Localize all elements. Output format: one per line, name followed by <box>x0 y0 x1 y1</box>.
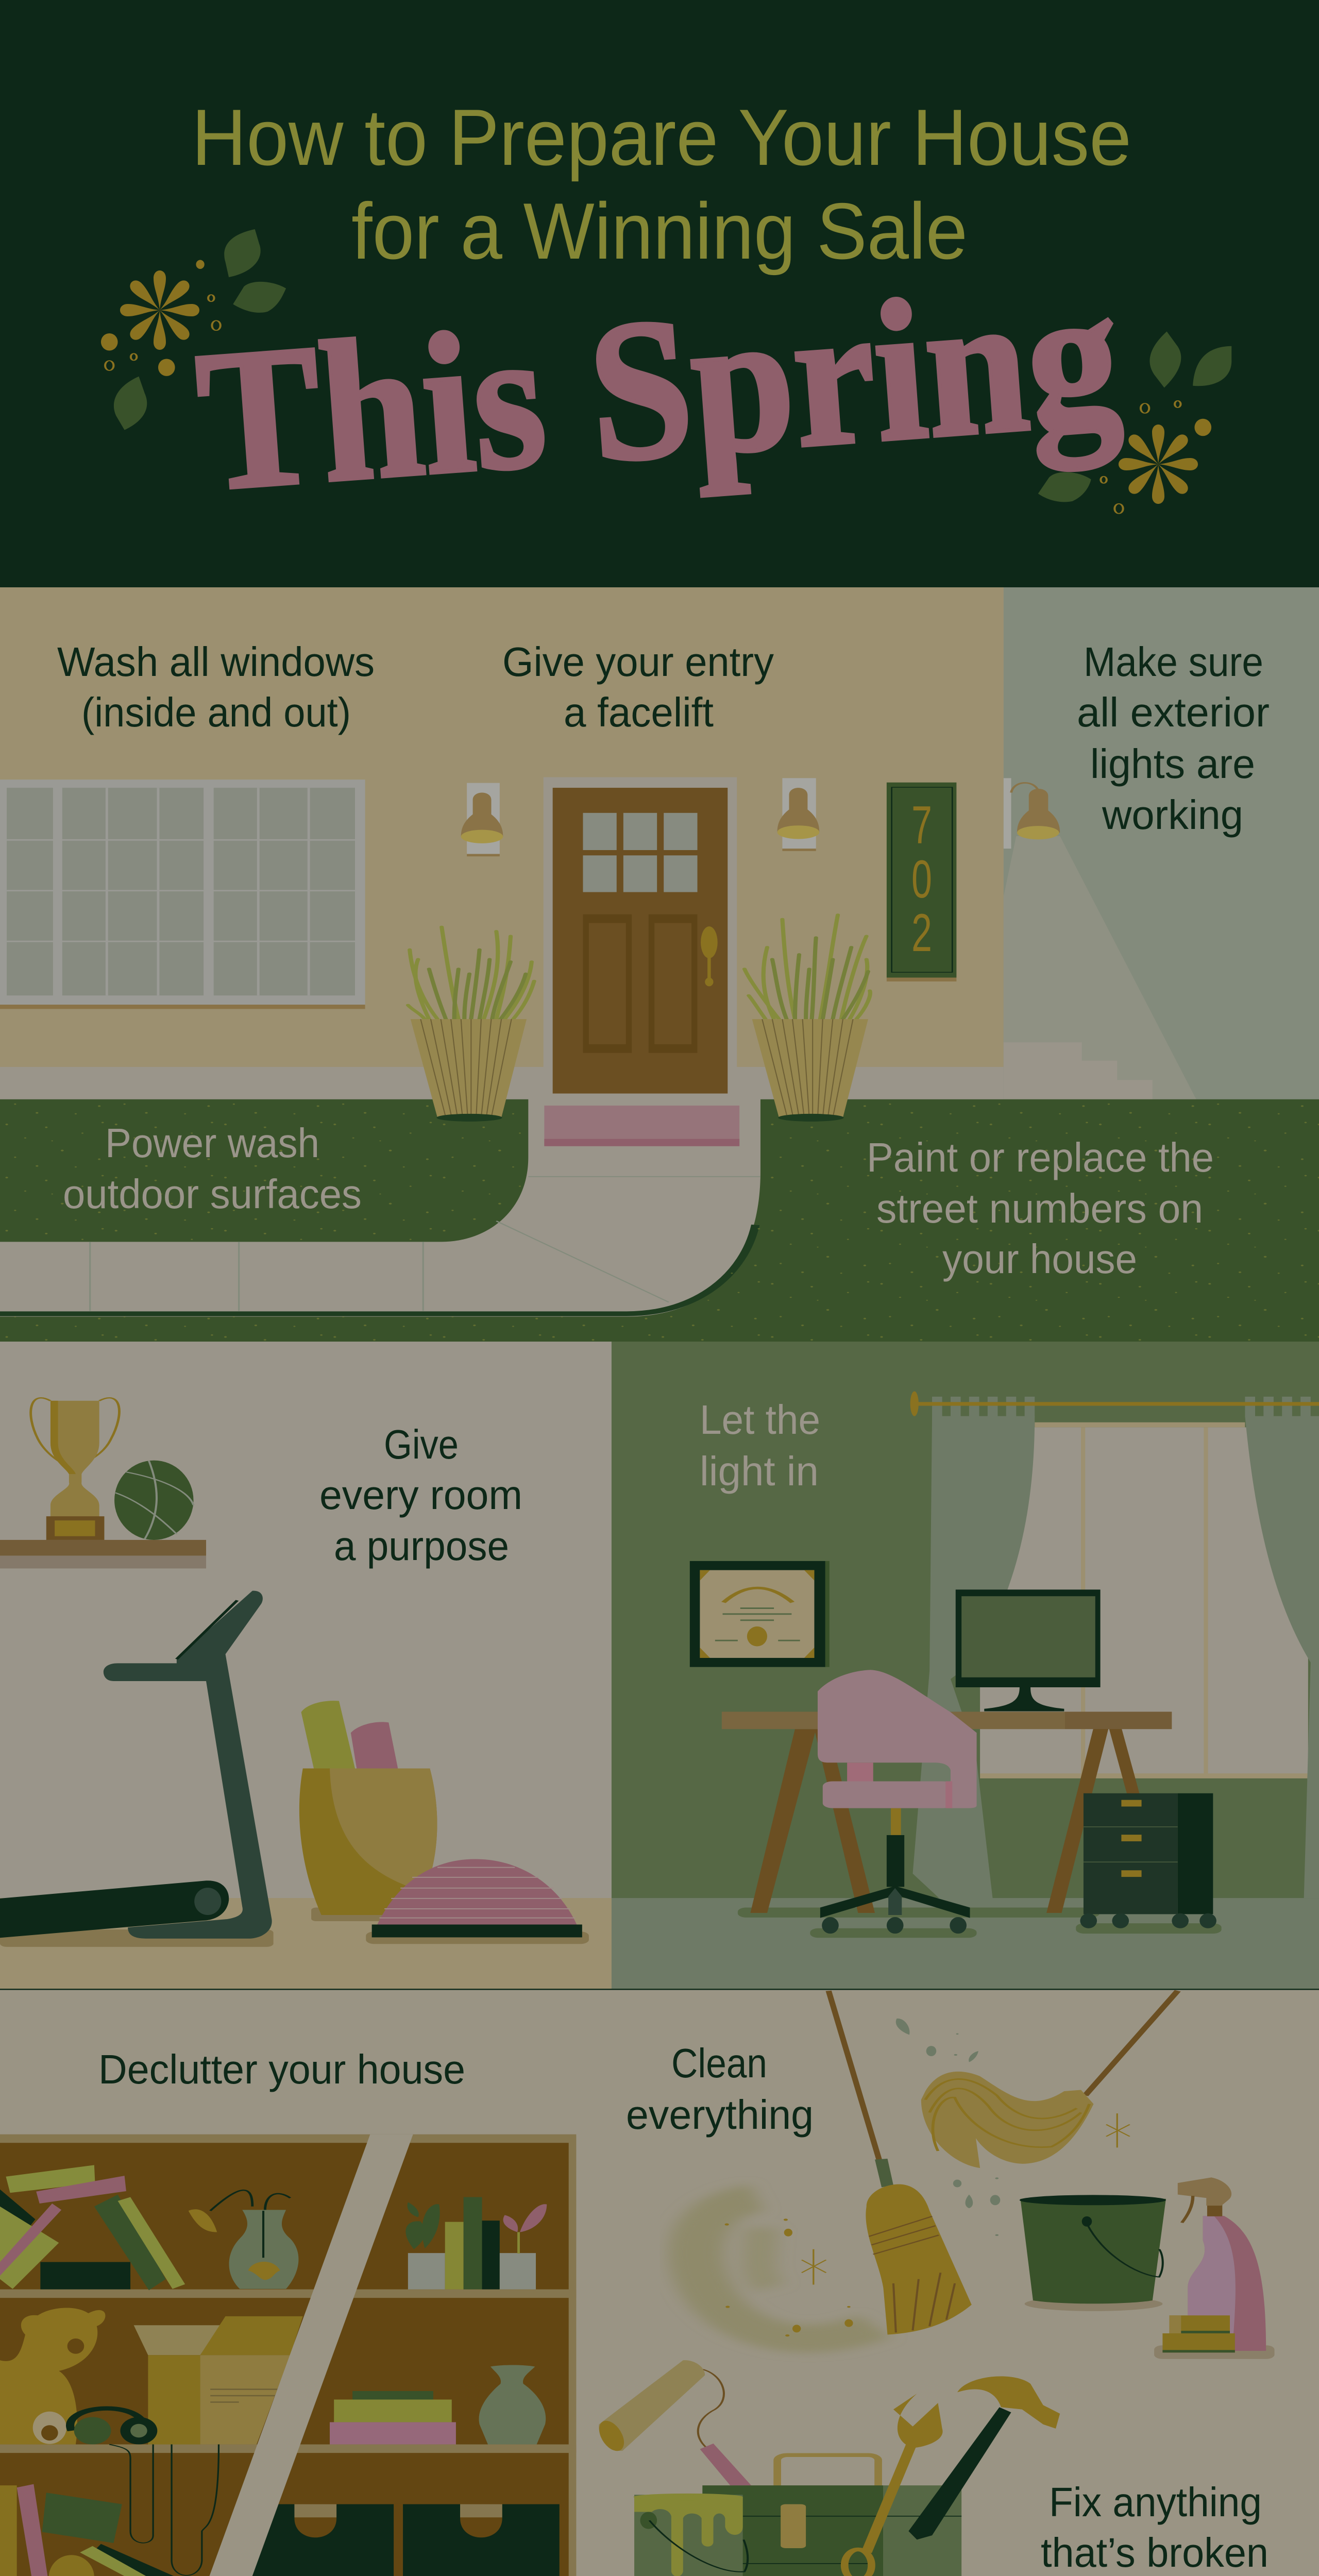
pavement joints <box>90 1177 760 1311</box>
text: exterior lights: Make sure <box>1084 639 1263 685</box>
icon: left flower <box>120 270 199 350</box>
broom <box>828 1991 972 2334</box>
panel: house exterior <box>0 587 1319 1342</box>
text: let the light in: Let the <box>700 1397 820 1443</box>
bottom left items <box>0 2485 17 2576</box>
door frame and door <box>544 777 737 1099</box>
house numbers: 7 <box>911 795 932 855</box>
text: give every room a purpose: Give <box>384 1421 459 1467</box>
shelf <box>0 1540 206 1568</box>
planter left <box>408 927 534 1122</box>
text: power wash: outdoor surfaces <box>63 1171 362 1217</box>
decorative flowers and leaves: right <box>1038 331 1231 514</box>
text: entry facelift <box>502 639 774 735</box>
monitor <box>956 1589 1101 1711</box>
lawn right <box>0 1099 1319 1342</box>
text: give every room a purpose: every room <box>319 1472 522 1518</box>
text: exterior lights <box>1077 639 1270 838</box>
vase with flowers <box>210 2190 290 2211</box>
text: entry facelift: a facelift <box>564 689 714 735</box>
water drops <box>896 2019 1000 2236</box>
text: fix anything: that’s broken <box>1041 2530 1269 2575</box>
panel: home gym room <box>0 1342 612 1989</box>
light cone <box>1004 836 1196 1099</box>
bin with mats <box>299 1701 437 1921</box>
spray bottle and sponges <box>1154 2177 1275 2359</box>
floor shadow <box>0 1929 274 1947</box>
file cabinet <box>1080 1793 1216 1928</box>
text: power wash <box>63 1120 362 1217</box>
panel: home office room <box>612 1342 1319 1989</box>
text: street numbers: your house <box>942 1236 1137 1282</box>
doormat <box>544 1106 739 1146</box>
lamp right <box>1004 778 1060 849</box>
desk <box>722 1711 1172 1913</box>
books top left <box>6 2165 95 2193</box>
icon: right flower <box>1119 425 1198 504</box>
text: wash windows: Wash all windows <box>57 639 375 685</box>
treadmill frame <box>0 1591 272 1939</box>
house numbers: 0 <box>911 850 932 909</box>
box <box>134 2325 221 2355</box>
left curtain <box>912 1397 1035 1911</box>
text: exterior lights: lights are <box>1090 741 1255 787</box>
house numbers <box>911 795 932 963</box>
text: entry facelift: Give your entry <box>502 639 774 685</box>
certificate <box>690 1561 830 1667</box>
lawn left <box>0 1099 528 1242</box>
text: let the light in <box>700 1397 820 1494</box>
decorative flowers and leaves: left <box>101 229 286 430</box>
chair <box>818 1670 977 1934</box>
bucket <box>1020 2195 1166 2311</box>
sparkles and dust dots <box>725 2113 1130 2336</box>
curtain rod <box>910 1391 1319 1416</box>
toolbox <box>702 2455 966 2576</box>
text: street numbers: street numbers on <box>876 1185 1203 1231</box>
text: clean everything <box>626 2040 814 2138</box>
balance dome <box>366 1859 589 1944</box>
title line 2: for a Winning Sale <box>351 187 968 276</box>
panel: header background <box>0 0 1319 587</box>
window <box>980 1422 1308 1778</box>
text: declutter: Declutter your house <box>98 2046 465 2092</box>
text: fix anything: Fix anything <box>1049 2479 1262 2525</box>
text: clean everything: Clean <box>671 2040 767 2086</box>
storage drawers <box>244 2504 560 2576</box>
bookshelf <box>0 2134 589 2576</box>
right curtain <box>1245 1397 1319 1898</box>
paint roller <box>595 2360 751 2485</box>
panel: declutter, clean, fix <box>0 1990 1319 2576</box>
lawn speckles right <box>0 1099 1319 1342</box>
headphones <box>70 2409 145 2431</box>
text: fix anything <box>1041 2479 1269 2575</box>
hammer <box>908 2376 1060 2539</box>
text: let the light in: light in <box>700 1448 819 1494</box>
dust swirl <box>696 2198 875 2338</box>
floor shadows <box>738 1908 1222 1938</box>
plant and books on shelf <box>405 2202 440 2249</box>
ball <box>114 1461 194 1540</box>
text: wash windows <box>57 639 375 735</box>
stairs <box>1004 1042 1153 1099</box>
text: street numbers <box>867 1134 1214 1282</box>
text: exterior lights: all exterior <box>1077 689 1270 735</box>
text: exterior lights: working <box>1102 792 1243 838</box>
lamp left <box>461 783 503 856</box>
paint can <box>628 2494 749 2576</box>
mop <box>921 1991 1178 2168</box>
text: clean everything: everything <box>626 2092 814 2138</box>
text: give every room a purpose: a purpose <box>334 1523 509 1569</box>
lawn speckles left <box>0 1099 528 1242</box>
big window <box>0 779 365 1009</box>
text: give every room a purpose <box>319 1421 522 1569</box>
text: wash windows: (inside and out) <box>81 689 351 735</box>
teddy bear <box>0 2308 105 2445</box>
title script: This Spring: This Spring <box>191 244 1127 536</box>
title line 1: How to Prepare Your House <box>192 93 1131 182</box>
trophy <box>31 1398 119 1540</box>
lamp middle <box>777 778 819 851</box>
text: power wash: Power wash <box>105 1120 319 1166</box>
planter right <box>745 915 870 1122</box>
text: street numbers: Paint or replace the <box>867 1134 1214 1180</box>
house numbers: 2 <box>911 903 932 963</box>
stacked books right <box>352 2391 433 2399</box>
house number sign <box>887 783 956 981</box>
wrench <box>844 2394 943 2576</box>
